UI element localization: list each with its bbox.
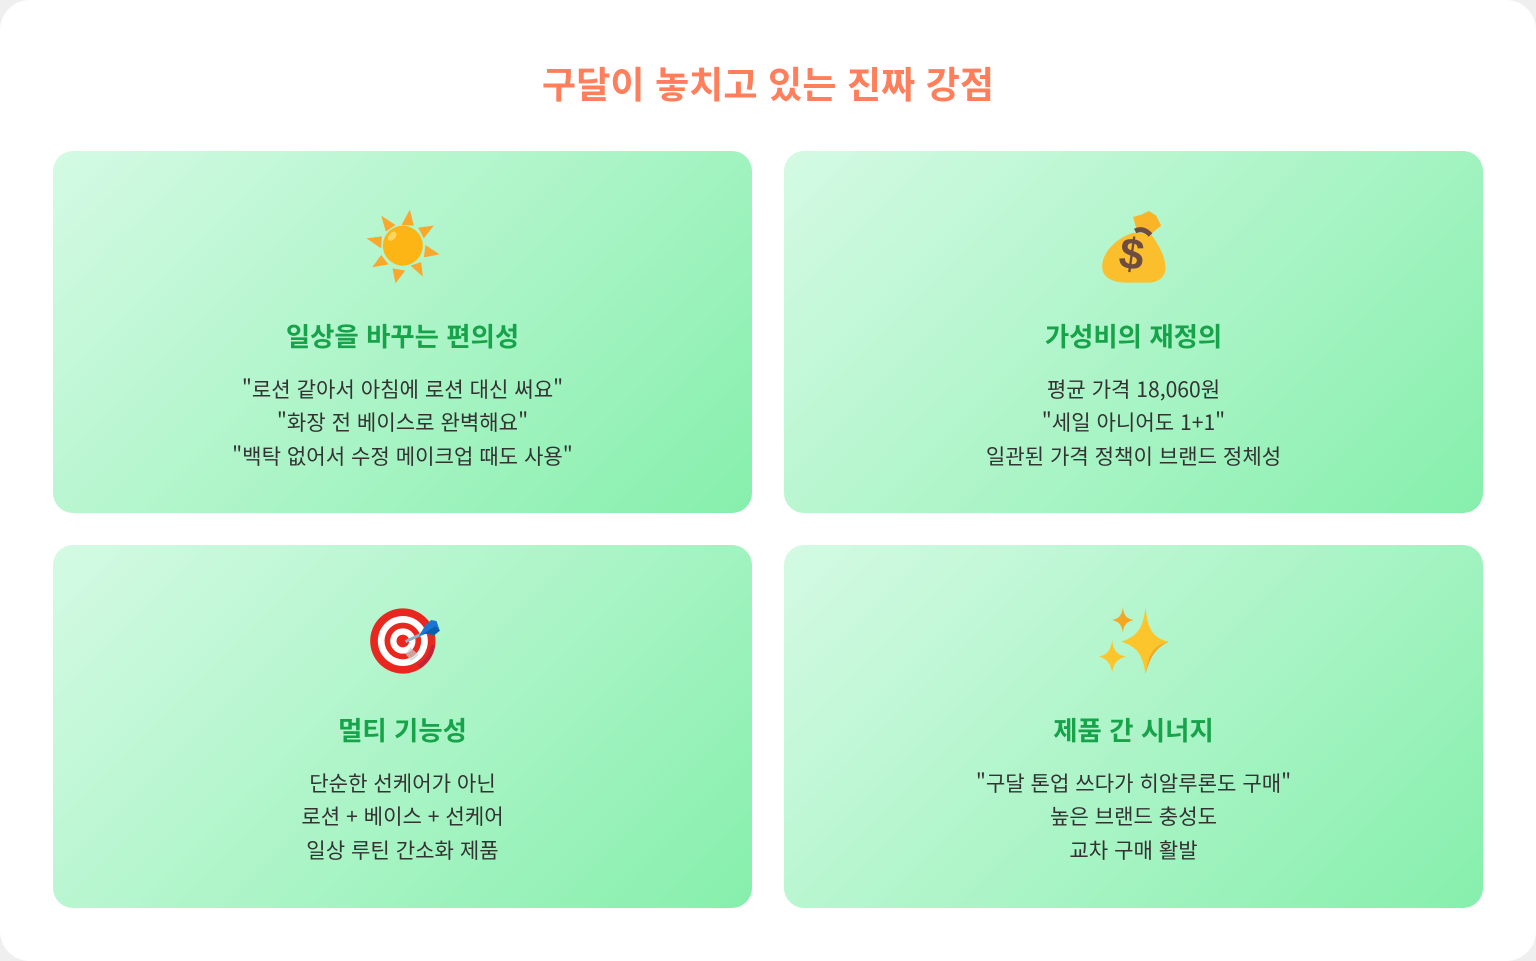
panel: multi function (53, 545, 752, 908)
text block: 단순한 선케어가 아닌 (309, 768, 496, 798)
icon: sun (366, 210, 440, 284)
text block: 평균 가격 18,060원 (1047, 374, 1220, 404)
heading: 제품 간 시너지 (1053, 709, 1214, 748)
text block (986, 374, 1281, 471)
text block: 일관된 가격 정책이 브랜드 정체성 (986, 441, 1281, 471)
text block: "구달 톤업 쓰다가 히알루론도 구매" (976, 768, 1291, 798)
text block: 높은 브랜드 충성도 (1050, 801, 1217, 831)
panel: product synergy (784, 545, 1483, 908)
icon: money bag (1102, 211, 1166, 283)
text block: "로션 같아서 아침에 로션 대신 써요" (242, 374, 563, 404)
text block: 교차 구매 활발 (1069, 835, 1198, 865)
heading: 가성비의 재정의 (1045, 314, 1222, 354)
title: 구달이 놓치고 있는 진짜 강점 (542, 55, 994, 109)
text block (232, 374, 573, 471)
text block (976, 768, 1291, 865)
panel: value for money (784, 151, 1483, 513)
text block: "화장 전 베이스로 완벽해요" (277, 407, 528, 437)
icon: target with dart (370, 608, 440, 674)
heading: 일상을 바꾸는 편의성 (286, 314, 519, 354)
icon: money bag: $ (1116, 229, 1147, 280)
panel: everyday convenience (53, 151, 752, 513)
text block (301, 768, 504, 865)
text block: 로션 + 베이스 + 선케어 (301, 801, 504, 831)
text block: 일상 루틴 간소화 제품 (306, 835, 499, 865)
text block: "세일 아니어도 1+1" (1042, 407, 1225, 437)
icon: sparkles (1099, 608, 1169, 674)
heading: 멀티 기능성 (338, 709, 467, 748)
text block: "백탁 없어서 수정 메이크업 때도 사용" (232, 441, 573, 471)
